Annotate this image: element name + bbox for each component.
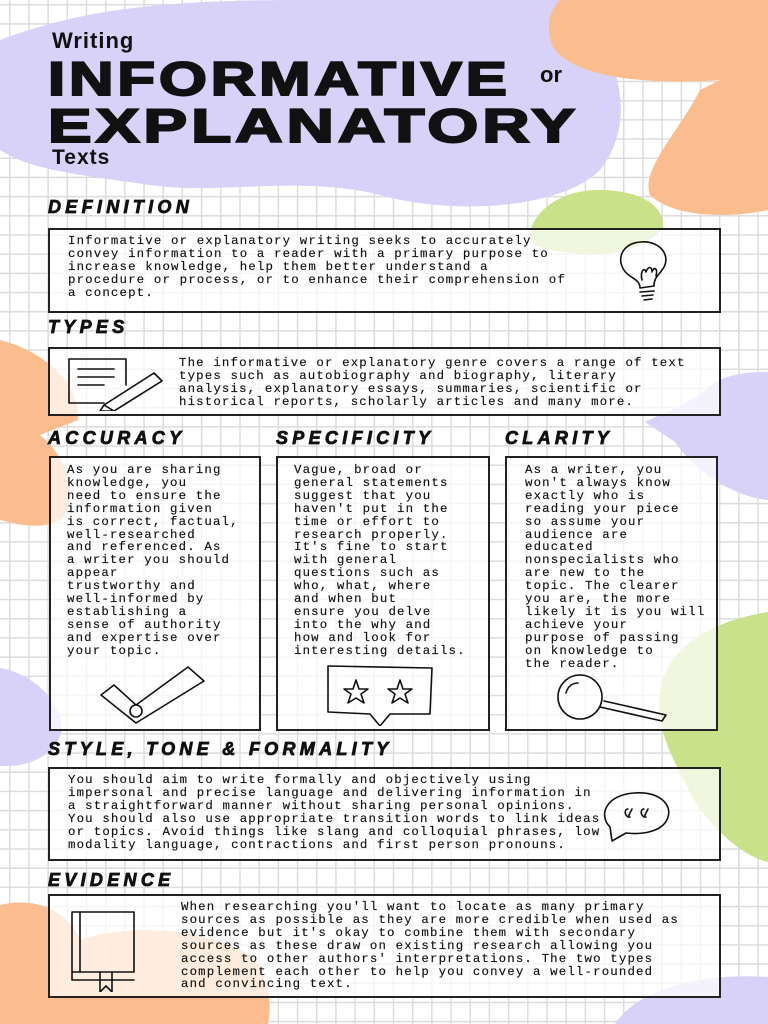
text: evidence: sources as possible as they are more credible when used as <box>181 913 679 927</box>
text: accuracy: information given <box>67 502 213 516</box>
panel: clarity <box>505 456 718 731</box>
text: accuracy: a writer you should <box>67 553 230 567</box>
text: definition: a concept. <box>68 286 154 300</box>
text: definition: Informative or explanatory writing seeks to accurately <box>68 234 532 248</box>
text: specificity: how and look for <box>294 631 431 645</box>
text: clarity <box>524 463 705 671</box>
text: definition: procedure or process, or to enhance their comprehension of <box>68 273 566 287</box>
text: clarity: achieve your <box>525 618 628 632</box>
blob: green top <box>530 190 664 254</box>
blob: orange bottom left <box>0 902 270 1024</box>
text: evidence: access to other authors' interpretations. The two types <box>181 952 653 966</box>
text: clarity: topic. The clearer <box>525 579 680 593</box>
text: clarity: you are, the more <box>525 592 671 606</box>
text: accuracy: knowledge, you <box>67 476 187 490</box>
text: clarity: the reader. <box>525 657 619 671</box>
text: definition: convey information to a reader with a primary purpose to <box>68 247 549 261</box>
heading: clarity: CLARITY <box>505 428 613 448</box>
text: style: modality language, contractions and first person pronouns. <box>68 838 566 852</box>
heading: definition: DEFINITION <box>48 197 193 217</box>
text: specificity <box>294 463 466 658</box>
text: style <box>68 773 600 852</box>
text: specificity: with general <box>294 553 397 567</box>
text: clarity: nonspecialists who <box>525 553 680 567</box>
text: specificity: interesting details. <box>294 644 466 658</box>
text: clarity: won't always know <box>525 476 671 490</box>
title <box>48 28 579 169</box>
text: accuracy: need to ensure the <box>67 489 222 503</box>
title: Writing <box>52 28 134 53</box>
text: accuracy: sense of authority <box>67 618 222 632</box>
icon: book <box>71 911 135 992</box>
text: accuracy: appear <box>67 566 119 580</box>
text: specificity: time or effort to <box>294 515 440 529</box>
blob: lavender right <box>645 372 768 500</box>
text: accuracy: As you are sharing <box>67 463 222 477</box>
title: EXPLANATORY <box>48 99 579 152</box>
text: clarity: educated <box>525 540 594 554</box>
icon: paper and pencil <box>68 358 163 411</box>
blob: orange left <box>0 340 78 526</box>
icon: speech bubble with stars <box>327 665 433 726</box>
panel: specificity <box>276 456 490 731</box>
text: accuracy: and expertise over <box>67 631 222 645</box>
heading: specificity: SPECIFICITY <box>276 428 434 448</box>
panel: types <box>48 347 721 416</box>
icon: light bulb <box>620 241 667 301</box>
text: style: You should aim to write formally and objectively using <box>68 773 532 787</box>
text: evidence: complement each other to help you convey a well-rounded <box>181 965 653 979</box>
text: accuracy: and referenced. As <box>67 540 222 554</box>
text: accuracy: well-informed by <box>67 592 204 606</box>
text: accuracy: is correct, factual, <box>67 515 239 529</box>
text: specificity: questions such as <box>294 566 440 580</box>
text: style: You should also use appropriate transition words to link ideas <box>68 812 600 826</box>
text: clarity: likely it is you will <box>525 605 705 619</box>
text: types <box>179 356 686 409</box>
title: Texts <box>52 146 110 169</box>
text: evidence: and convincing text. <box>181 977 353 991</box>
blob: green right <box>659 612 768 862</box>
blob: lavender bottom right <box>615 976 768 1024</box>
text: specificity: Vague, broad or <box>294 463 423 477</box>
text: evidence: evidence but it's okay to combine them with secondary <box>181 926 636 940</box>
text: specificity: research properly. <box>294 528 449 542</box>
text: clarity: purpose of passing <box>525 631 680 645</box>
icon: quote bubble <box>604 792 670 842</box>
text: accuracy: trustworthy and <box>67 579 196 593</box>
text: specificity: and when but <box>294 592 397 606</box>
blob: lavender top <box>0 0 621 206</box>
text: clarity: As a writer, you <box>525 463 662 477</box>
panel: evidence <box>48 894 721 998</box>
panel: style <box>48 767 721 861</box>
text: specificity: who, what, where <box>294 579 431 593</box>
text: clarity: on knowledge to <box>525 644 654 658</box>
text: clarity: audience are <box>525 528 628 542</box>
text: clarity: exactly who is <box>525 489 645 503</box>
text: evidence: sources as these draw on existing research allowing you <box>181 939 653 953</box>
text: style: impersonal and precise language and delivering information in <box>68 786 592 800</box>
text: specificity: ensure you delve <box>294 605 431 619</box>
text: specificity: suggest that you <box>294 489 431 503</box>
heading: evidence: EVIDENCE <box>48 870 174 890</box>
text: evidence: When researching you'll want to locate as many primary <box>181 900 645 914</box>
title: or <box>540 62 562 87</box>
text: types: analysis, explanatory essays, summaries, scientific or <box>179 382 643 396</box>
text: clarity: so assume your <box>525 515 645 529</box>
text: types: The informative or explanatory genre covers a range of text <box>179 356 686 370</box>
icon: magnifying glass <box>557 674 667 722</box>
heading: types: TYPES <box>48 317 129 337</box>
text: definition: increase knowledge, help them better understand a <box>68 260 489 274</box>
icon: check mark <box>100 666 205 724</box>
text: clarity: are new to the <box>525 566 645 580</box>
text: evidence <box>180 900 679 991</box>
text: types: historical reports, scholarly articles and many more. <box>179 395 634 409</box>
text: specificity: haven't put in the <box>294 502 449 516</box>
text: clarity: reading your piece <box>525 502 680 516</box>
text: types: types such as autobiography and biography, literary <box>179 369 617 383</box>
text: style: or topics. Avoid things like slang and colloquial phrases, low <box>68 825 600 839</box>
text: specificity: general statements <box>294 476 449 490</box>
blob: orange top right <box>548 0 768 215</box>
blob: lavender left <box>0 668 62 766</box>
text: definition <box>68 234 566 300</box>
text: accuracy <box>66 463 239 658</box>
text: accuracy: well-researched <box>67 528 196 542</box>
text: style: a straightforward manner without sharing personal opinions. <box>68 799 575 813</box>
title: INFORMATIVE <box>48 52 511 105</box>
text: accuracy: your topic. <box>67 644 161 658</box>
text: specificity: into the why and <box>294 618 431 632</box>
heading: accuracy: ACCURACY <box>48 428 185 448</box>
text: specificity: It's fine to start <box>294 540 449 554</box>
panel: definition <box>48 228 721 313</box>
heading: style tone formality: STYLE, TONE & FORMALITY <box>48 739 393 759</box>
panel: accuracy <box>49 456 261 731</box>
text: accuracy: establishing a <box>67 605 187 619</box>
